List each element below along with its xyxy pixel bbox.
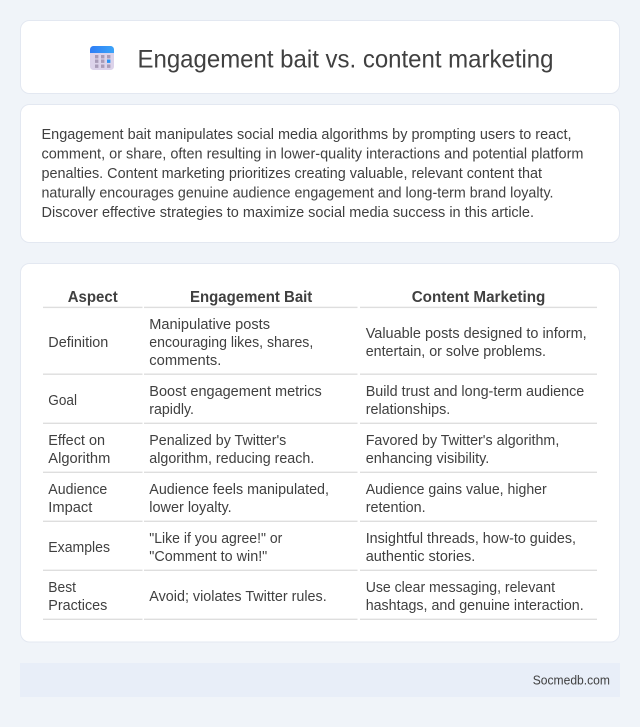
text block: introduction paragraph: naturally encourages genuine audience engagement and long-term brand loyalty. bbox=[42, 184, 554, 202]
table header row: Aspect bbox=[68, 289, 118, 306]
panel: comparison table bbox=[20, 264, 620, 642]
text block: introduction paragraph: penalties. Content marketing prioritizes creating valuable, relevant content that bbox=[42, 165, 543, 182]
table row: Definition: encouraging likes, shares, bbox=[149, 335, 313, 351]
text block: introduction paragraph bbox=[42, 126, 584, 221]
table header row bbox=[68, 289, 545, 306]
table row: Audience Impact: Audience gains value, higher bbox=[366, 482, 547, 498]
table row: Effect on Algorithm: algorithm, reducing reach. bbox=[149, 451, 314, 467]
title: Engagement bait vs. content marketing bbox=[138, 46, 554, 74]
table row: Goal: Goal bbox=[48, 393, 77, 409]
table row: Definition: comments. bbox=[149, 353, 221, 369]
table row: Definition: Definition bbox=[48, 335, 108, 351]
table row: Examples bbox=[48, 531, 576, 565]
table header row: Content Marketing bbox=[412, 289, 545, 306]
table row: Audience Impact: Audience bbox=[48, 482, 107, 498]
table row: Audience Impact bbox=[48, 482, 547, 516]
table row: Examples: "Comment to win!" bbox=[149, 549, 267, 565]
table row: Examples: authentic stories. bbox=[366, 549, 475, 565]
panel: introduction bbox=[20, 104, 620, 242]
footer bbox=[20, 663, 620, 697]
table row: Audience Impact: Impact bbox=[48, 500, 92, 516]
table row: Best Practices: Practices bbox=[48, 598, 107, 614]
table row: Effect on Algorithm bbox=[48, 433, 559, 467]
table row: Audience Impact: lower loyalty. bbox=[149, 500, 232, 516]
table row: Audience Impact: Audience feels manipulated, bbox=[149, 482, 329, 498]
table row: Effect on Algorithm: Favored by Twitter's algorithm, bbox=[366, 433, 559, 449]
table row: Best Practices: hashtags, and genuine interaction. bbox=[366, 598, 584, 614]
table row: Best Practices: Avoid; violates Twitter rules. bbox=[149, 589, 327, 605]
table row: Definition bbox=[48, 317, 587, 369]
table row: Examples: Examples bbox=[48, 540, 110, 556]
table header row: Engagement Bait bbox=[190, 289, 312, 306]
table row: Goal: rapidly. bbox=[149, 402, 194, 418]
text block: introduction paragraph: comment, or share, often resulting in lower-quality interactions and potential platform bbox=[42, 146, 584, 162]
footer source text: Socmedb.com bbox=[533, 672, 610, 687]
text block: introduction paragraph: Discover effective strategies to maximize social media success in this article. bbox=[42, 204, 534, 221]
table row: Goal: Boost engagement metrics bbox=[149, 384, 322, 400]
table row: Best Practices bbox=[48, 580, 584, 614]
table row: Definition: entertain, or solve problems. bbox=[366, 344, 546, 360]
text block: introduction paragraph: Engagement bait manipulates social media algorithms by prompting users to react, bbox=[42, 126, 572, 143]
table row: Goal bbox=[48, 384, 584, 418]
table row: Definition: Manipulative posts bbox=[149, 317, 270, 333]
table row: Definition: Valuable posts designed to inform, bbox=[366, 326, 587, 342]
table row: Effect on Algorithm: Penalized by Twitter's bbox=[149, 433, 286, 449]
table row: Examples: Insightful threads, how-to guides, bbox=[366, 531, 576, 547]
icon: calendar bbox=[90, 46, 114, 70]
table row: Effect on Algorithm: Algorithm bbox=[48, 451, 110, 467]
table row: Goal: Build trust and long-term audience bbox=[366, 384, 584, 400]
panel: title card bbox=[20, 20, 620, 94]
table row: Best Practices: Best bbox=[48, 580, 76, 596]
table row: Audience Impact: retention. bbox=[366, 500, 426, 516]
table row: Effect on Algorithm: enhancing visibility. bbox=[366, 451, 489, 467]
table row: Best Practices: Use clear messaging, relevant bbox=[366, 580, 555, 596]
table row: Examples: "Like if you agree!" or bbox=[149, 531, 282, 547]
table row: Goal: relationships. bbox=[366, 402, 450, 418]
table row: Effect on Algorithm: Effect on bbox=[48, 433, 105, 449]
